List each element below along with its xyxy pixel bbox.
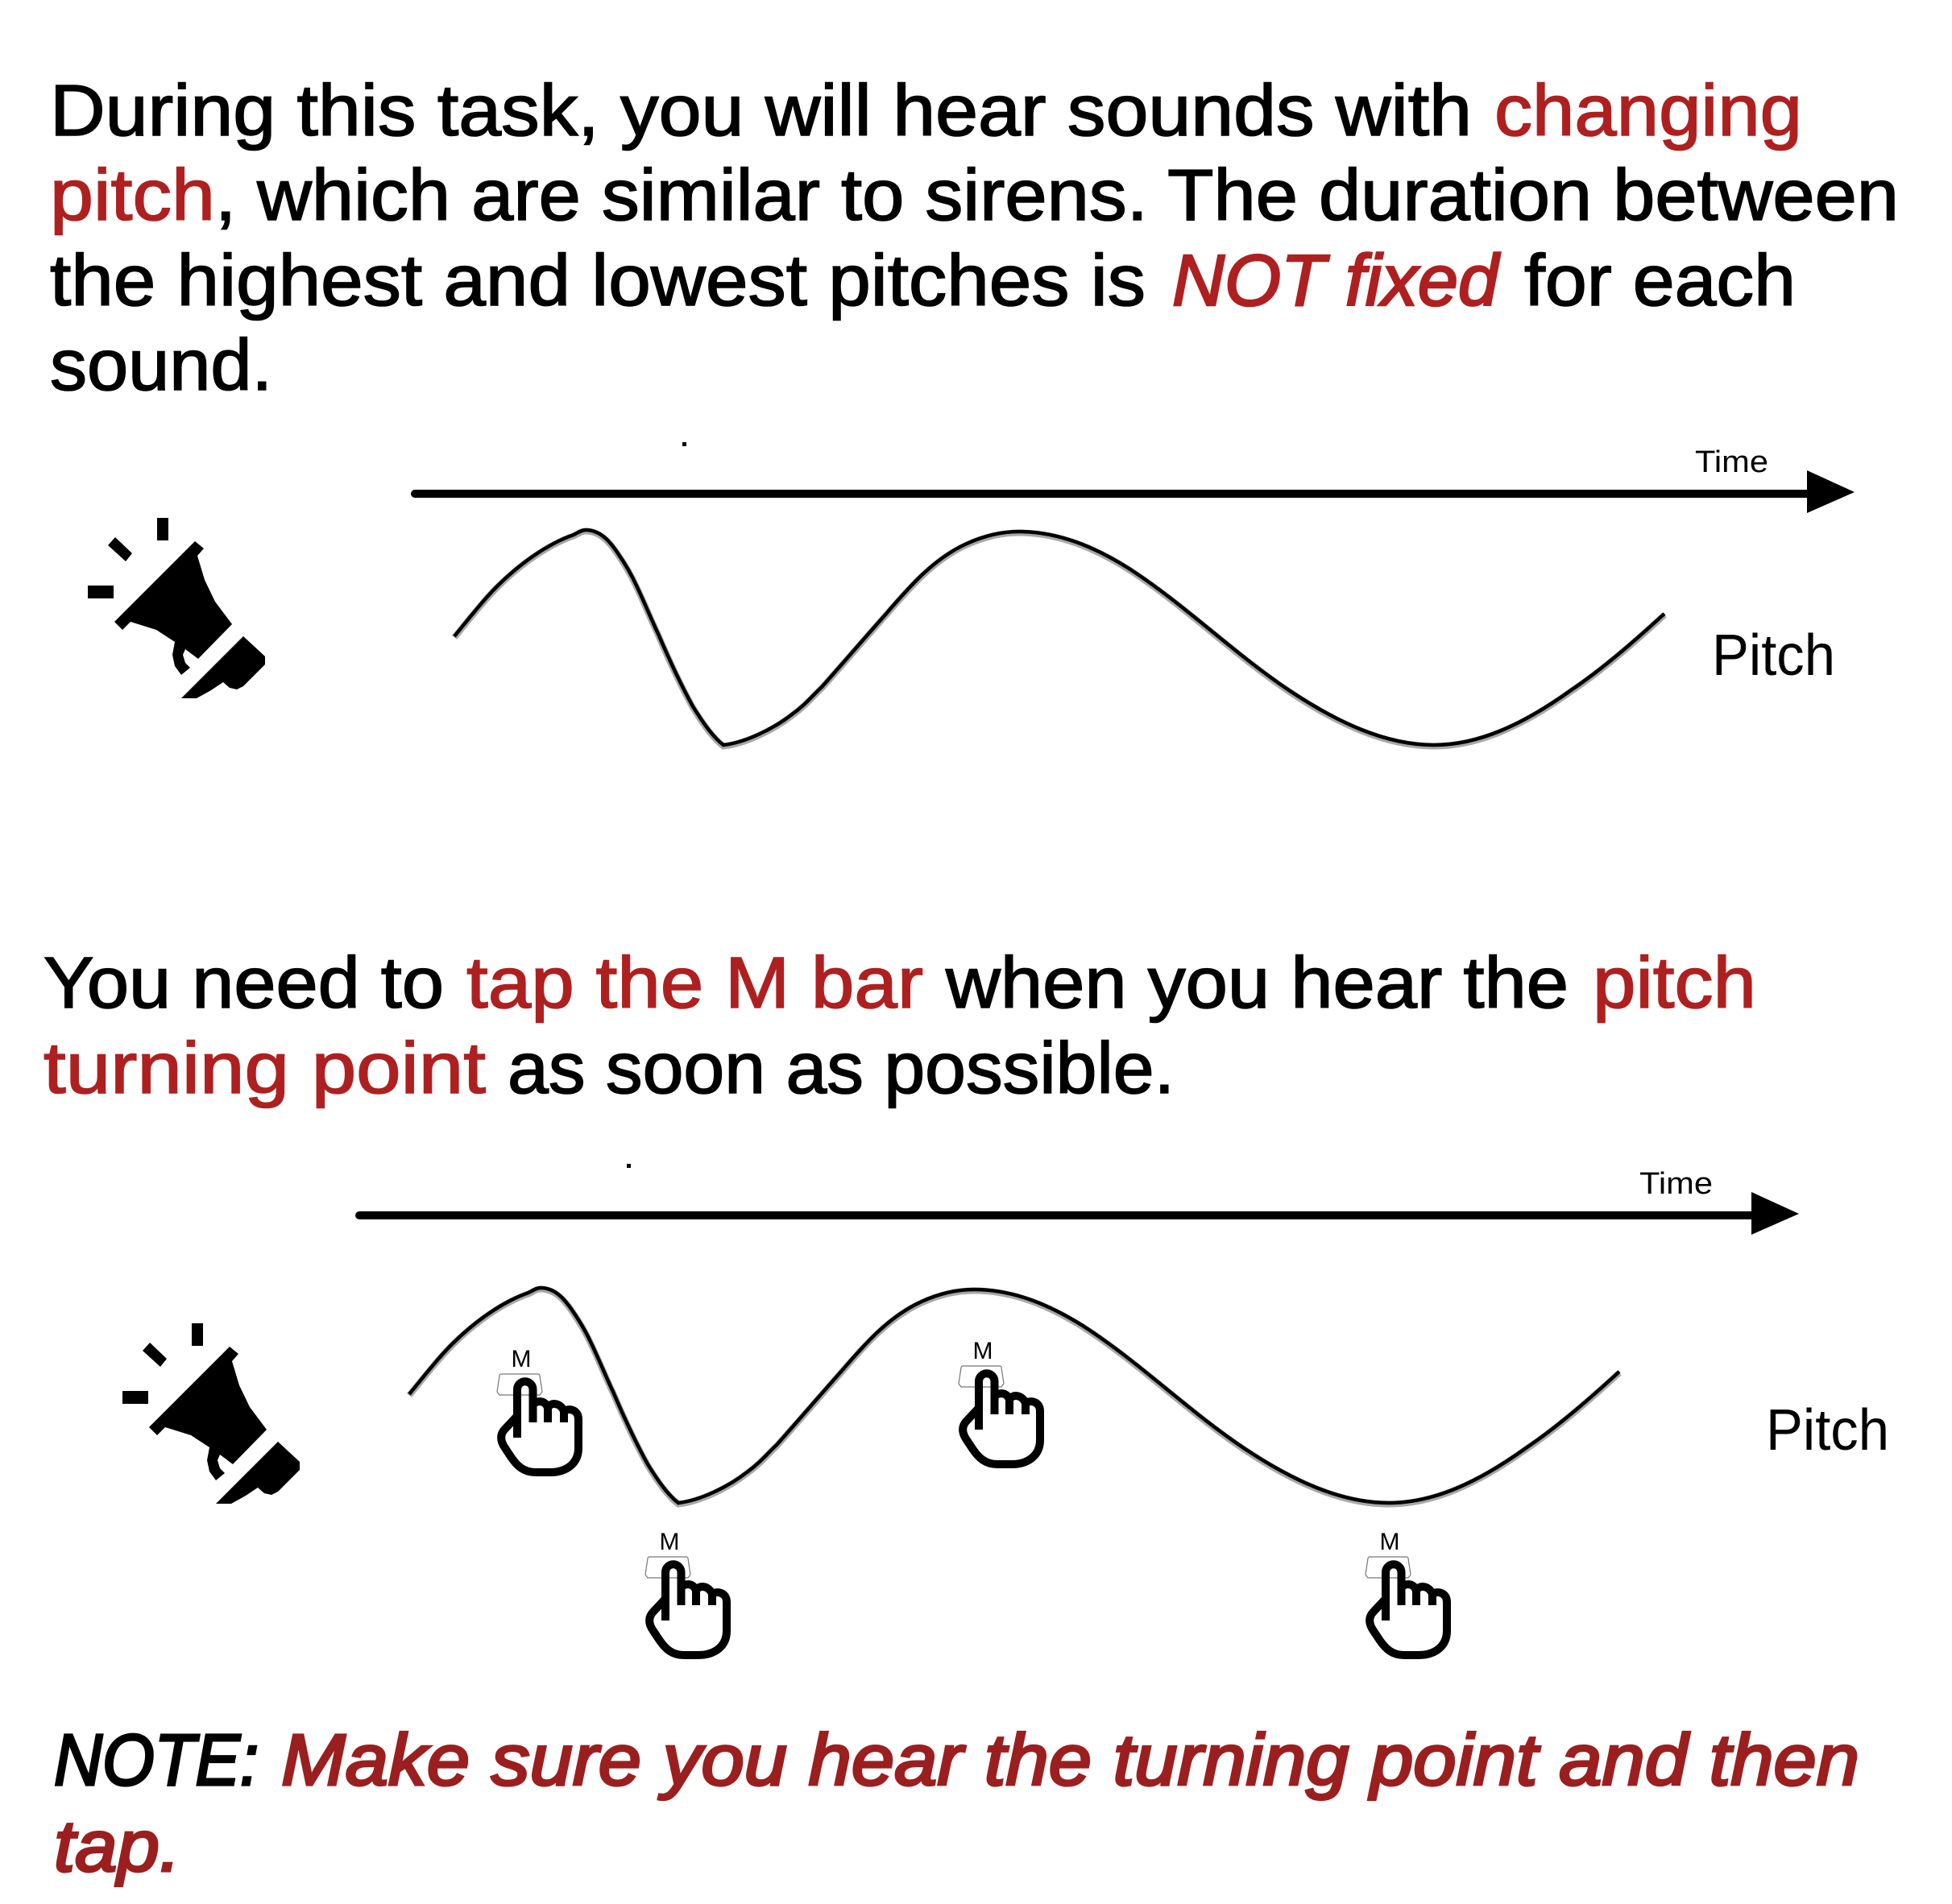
icon: hand tapping M key 3 [645, 1529, 727, 1655]
note text: Make sure you hear the turning point and then [281, 1720, 1859, 1801]
text block: intro paragraph: sound. [50, 325, 272, 406]
text block: instruction paragraph: pitch [1593, 943, 1756, 1024]
text block: instruction paragraph: You need to [44, 943, 444, 1024]
icon: hand tapping M key 2 [959, 1338, 1040, 1464]
text block: intro paragraph: changing [1494, 71, 1802, 151]
text block: intro paragraph: the highest and lowest pitches is [50, 241, 1146, 321]
label: pitch bottom: Pitch [1766, 1398, 1889, 1463]
text block: instruction paragraph [44, 943, 1756, 1109]
text block: intro paragraph: During this task, you will hear sounds with [50, 71, 1472, 151]
text block: instruction paragraph: when you hear the [945, 943, 1569, 1024]
note text: NOTE: [54, 1720, 259, 1801]
time axis arrow top: Time [1695, 445, 1768, 479]
text block: intro paragraph [50, 71, 1899, 406]
icon: hand tapping M key 2: M [973, 1338, 993, 1364]
icon: hand tapping M key 3: M [659, 1529, 680, 1555]
label: pitch top: Pitch [1712, 623, 1835, 688]
icon: hand tapping M key 1 [497, 1346, 578, 1472]
time axis arrow bottom [359, 1164, 1799, 1235]
text block: intro paragraph: for each [1524, 241, 1796, 321]
pitch contour bottom [409, 1288, 1619, 1505]
text block: intro paragraph: NOT fixed [1172, 241, 1501, 321]
text block: intro paragraph: , which are similar to sirens. The duration between [215, 155, 1899, 236]
pitch contour top [454, 530, 1664, 746]
time axis arrow top [415, 442, 1855, 513]
text block: instruction paragraph: turning point [44, 1029, 486, 1109]
text block: instruction paragraph: tap the M bar [466, 943, 923, 1024]
text block: intro paragraph: pitch [50, 155, 215, 236]
note text [54, 1720, 1859, 1887]
icon: hand tapping M key 4 [1366, 1529, 1447, 1655]
time axis arrow bottom: Time [1639, 1167, 1713, 1201]
text block: instruction paragraph: as soon as possible. [508, 1029, 1175, 1109]
icon: hand tapping M key 1: M [511, 1346, 532, 1372]
icon: megaphone bottom [122, 1323, 300, 1504]
icon: megaphone top [88, 518, 265, 698]
note text: tap. [54, 1807, 180, 1887]
icon: hand tapping M key 4: M [1379, 1529, 1400, 1555]
